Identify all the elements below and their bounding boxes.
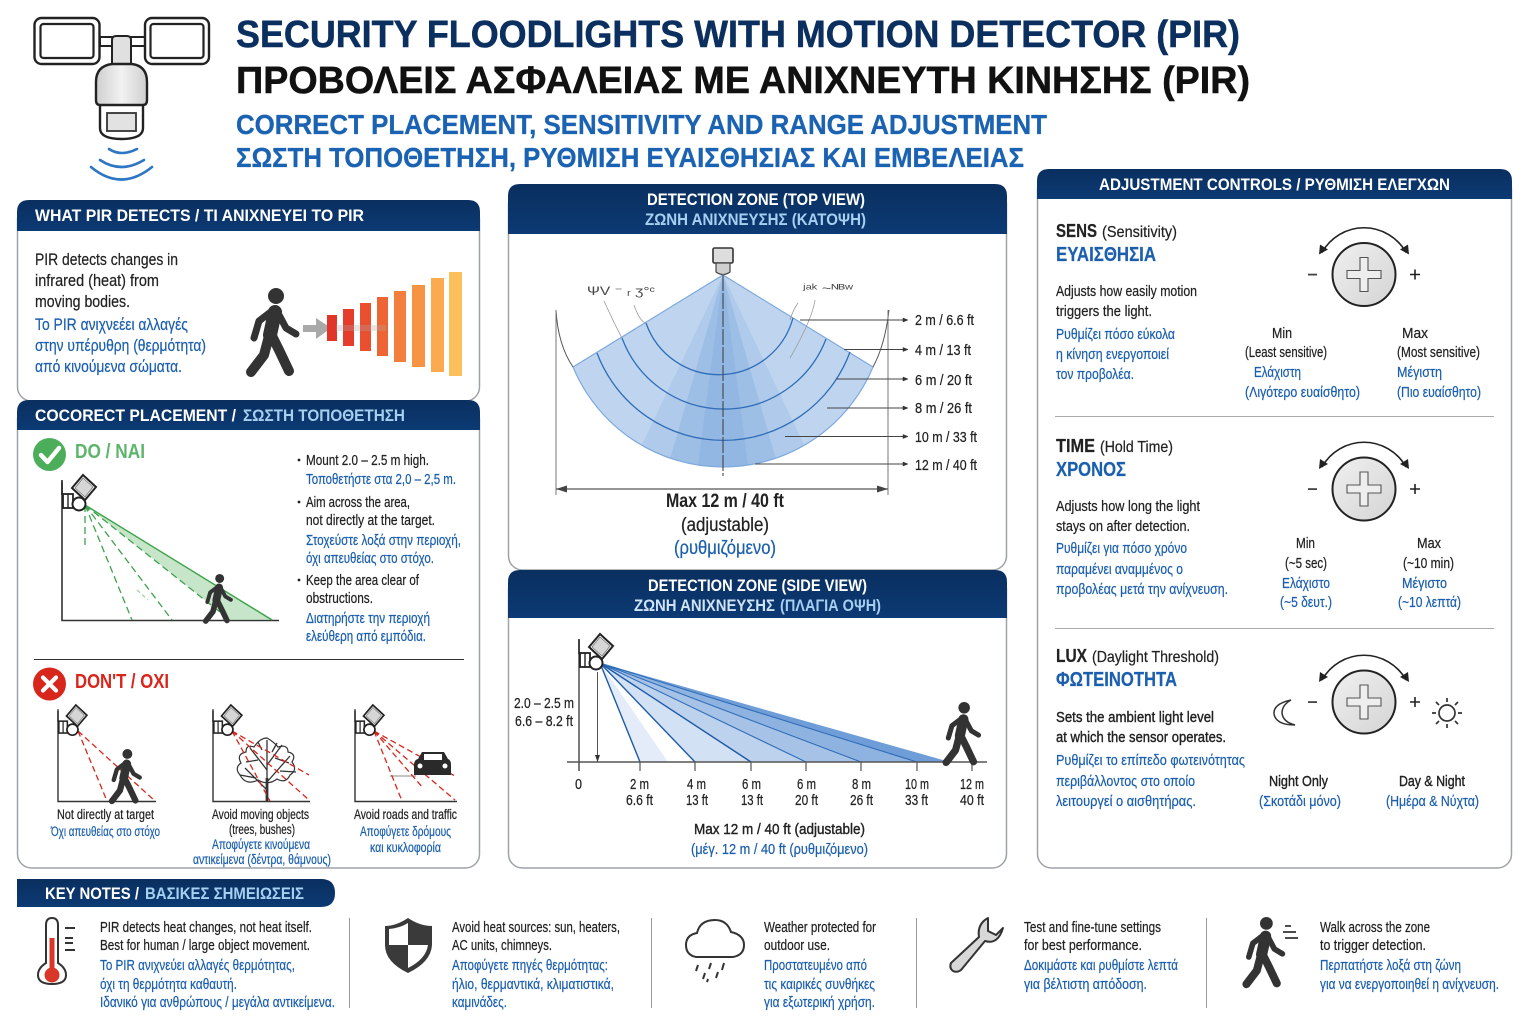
- control: TIME: Max: [1417, 536, 1442, 552]
- heading: key notes: [17, 879, 335, 907]
- note: heat: όχι τη θερμότητα καθαυτή.: [100, 976, 237, 993]
- diagram: not directly at target: [58, 705, 156, 802]
- caption: avoid roads: και κυκλοφορία: [370, 840, 441, 855]
- text block: do bullets: ελεύθερη από εμπόδια.: [306, 629, 426, 645]
- axis labels: 10 m: [905, 777, 929, 793]
- distance labels: 2 m / 6.6 ft: [915, 313, 974, 329]
- text block: do bullets: not directly at the target.: [306, 513, 435, 529]
- subtitle: CORRECT PLACEMENT, SENSITIVITY AND RANGE ADJUSTMENT: [236, 109, 1047, 140]
- note: walk test: to trigger detection.: [1320, 937, 1426, 954]
- note: heat: PIR detects heat changes, not heat itself.: [100, 919, 312, 936]
- max range note: (adjustable): [681, 515, 769, 536]
- max range note: (ρυθμιζόμενο): [674, 538, 776, 559]
- control: LUX: (Daylight Threshold): [1092, 649, 1219, 666]
- heading: don't: DON'T / ΟΧΙ: [75, 671, 169, 693]
- axis labels: 26 ft: [850, 793, 873, 809]
- control: TIME: (~5 sec): [1285, 556, 1327, 572]
- diagram: avoid roads: [355, 705, 457, 802]
- title: ΠΡΟΒΟΛΕΙΣ ΑΣΦΑΛΕΙΑΣ ΜΕ ΑΝΙΧΝΕΥΤΗ ΚΙΝΗΣΗΣ (PIR): [236, 60, 1250, 102]
- axis labels: 6.6 ft: [626, 793, 653, 809]
- note: weather: outdoor use.: [764, 937, 830, 954]
- text block: do bullets: Aim across the area,: [306, 495, 410, 511]
- icon: thermometer: [38, 918, 75, 984]
- distance labels: 12 m / 40 ft: [915, 458, 977, 474]
- control: SENS: ΕΥΑΙΣΘΗΣΙΑ: [1056, 244, 1156, 266]
- control: SENS: (Sensitivity): [1102, 224, 1177, 241]
- chart: top view fan: [556, 270, 890, 495]
- heading: what PIR detects: [17, 200, 480, 231]
- icon: green check: [33, 438, 66, 471]
- heading: what PIR detects: WHAT PIR DETECTS / ΤΙ ΑΝΙΧΝΕΥΕΙ ΤΟ PIR: [35, 207, 364, 225]
- text block: do bullets: obstructions.: [306, 591, 373, 607]
- control: LUX: [1056, 646, 1479, 810]
- icon: red cross: [33, 668, 66, 700]
- text block: PIR explanation: [35, 250, 206, 376]
- control: SENS: Max: [1402, 326, 1429, 342]
- note: heat: Το PIR ανιχνεύει αλλαγές θερμότητας,: [100, 957, 295, 974]
- control: SENS: Adjusts how easily motion: [1056, 283, 1197, 300]
- note: weather: Προστατευμένο από: [764, 957, 867, 974]
- note: heat sources: ήλιο, θερμαντικά, κλιματιστικά,: [452, 976, 614, 993]
- heading: key notes: ΒΑΣΙΚΕΣ ΣΗΜΕΙΩΣΕΙΣ: [145, 885, 304, 903]
- control: LUX: ΦΩΤΕΙΝΟΤΗΤΑ: [1056, 669, 1177, 691]
- axis labels: 6 m: [797, 777, 816, 793]
- heading: side view: [508, 570, 1007, 618]
- text block: PIR explanation: από κινούμενα σώματα.: [35, 357, 182, 376]
- height label: 6.6 – 8.2 ft: [515, 714, 573, 730]
- heading: correct placement: COCORECT PLACEMENT /: [35, 407, 236, 425]
- note: test: for best performance.: [1024, 937, 1142, 954]
- distance labels: 4 m / 13 ft: [915, 343, 971, 359]
- control: TIME: [1056, 436, 1461, 611]
- note: test: [1024, 919, 1178, 993]
- distance labels: 10 m / 33 ft: [915, 430, 977, 446]
- diagram: avoid moving objects: [213, 705, 310, 802]
- heading: side view: DETECTION ZONE (SIDE VIEW): [648, 577, 867, 595]
- control: TIME: παραμένει αναμμένος ο: [1056, 561, 1183, 578]
- distance labels: 8 m / 26 ft: [915, 401, 972, 417]
- control: TIME: (~5 δευτ.): [1280, 595, 1332, 611]
- control: SENS: [1056, 221, 1481, 401]
- note: heat: Best for human / large object movement.: [100, 937, 310, 954]
- control: LUX: Day & Night: [1399, 773, 1466, 790]
- panel: adjustment controls: [1037, 169, 1512, 868]
- text block: do bullets: Τοποθετήστε στα 2,0 – 2,5 m.: [306, 472, 456, 488]
- heading: correct placement: ΣΩΣΤΗ ΤΟΠΟΘΕΤΗΣΗ: [243, 407, 405, 425]
- control: LUX: (Ημέρα & Νύχτα): [1386, 793, 1479, 810]
- note: heat: Ιδανικό για ανθρώπους / μεγάλα αντικείμενα.: [100, 994, 335, 1011]
- heat bars: [327, 272, 462, 376]
- caption: avoid roads: Avoid roads and traffic: [354, 807, 457, 822]
- note: heat sources: Avoid heat sources: sun, heaters,: [452, 919, 620, 936]
- axis labels: 8 m: [852, 777, 871, 793]
- control: SENS: (Least sensitive): [1245, 345, 1327, 361]
- note: heat sources: [452, 919, 620, 1011]
- chart: side view beams: [567, 634, 987, 771]
- control: SENS: Min: [1272, 326, 1292, 342]
- title: SECURITY FLOODLIGHTS WITH MOTION DETECTOR (PIR): [236, 14, 1240, 56]
- control: LUX: LUX: [1056, 646, 1087, 666]
- text block: do bullets: Mount 2.0 – 2.5 m high.: [306, 453, 429, 469]
- subtitle: ΣΩΣΤΗ ΤΟΠΟΘΕΤΗΣΗ, ΡΥΘΜΙΣΗ ΕΥΑΙΣΘΗΣΙΑΣ ΚΑΙ ΕΜΒΕΛΕΙΑΣ: [236, 142, 1024, 173]
- panel: what PIR detects: [17, 200, 480, 401]
- chart: top view fan: ʲᵃᵏ ~ᴺᴮʷ: [802, 283, 854, 295]
- icon: sensor: [713, 248, 733, 274]
- side view range note: Max 12 m / 40 ft (adjustable): [694, 821, 865, 838]
- icon: shield: [385, 918, 432, 973]
- arrow: [303, 318, 331, 339]
- height label: [514, 696, 574, 730]
- caption: not directly at target: Not directly at target: [57, 807, 154, 822]
- heading: top view: DETECTION ZONE (TOP VIEW): [647, 191, 865, 209]
- icon: rain cloud: [686, 920, 744, 982]
- title: [236, 14, 1250, 102]
- icon: floodlight with sensor: [34, 18, 209, 180]
- heading: adjustment controls: ADJUSTMENT CONTROLS / ΡΥΘΜΙΣΗ ΕΛΕΓΧΩΝ: [1099, 176, 1450, 194]
- axis labels: [575, 777, 984, 809]
- side view range note: (μέγ. 12 m / 40 ft (ρυθμιζόμενο): [691, 841, 868, 858]
- panel: detection zone side view: [508, 570, 1007, 868]
- control: TIME: TIME: [1056, 436, 1095, 456]
- caption: avoid moving objects: (trees, bushes): [229, 822, 295, 837]
- note: heat sources: Αποφύγετε πηγές θερμότητας:: [452, 957, 608, 974]
- control: SENS: Μέγιστη: [1397, 365, 1442, 381]
- control: TIME: Μέγιστο: [1402, 576, 1447, 592]
- panel: correct placement: [17, 400, 480, 868]
- note: heat: [100, 919, 335, 1011]
- control: TIME: (Hold Time): [1100, 439, 1173, 456]
- control: LUX: (Σκοτάδι μόνο): [1259, 793, 1341, 810]
- caption: avoid roads: [354, 807, 457, 855]
- caption: avoid moving objects: Αποφύγετε κινούμενα: [212, 837, 310, 852]
- max range note: [666, 491, 785, 559]
- text block: do bullets: όχι απευθείας στο στόχο.: [306, 551, 434, 567]
- icon: TIME dial: [1308, 442, 1420, 520]
- note: walk test: Walk across the zone: [1320, 919, 1430, 936]
- distance labels: 6 m / 20 ft: [915, 373, 972, 389]
- control: TIME: Ρυθμίζει για πόσο χρόνο: [1056, 540, 1187, 557]
- control: SENS: triggers the light.: [1056, 303, 1152, 320]
- note: heat sources: καμινάδες.: [452, 994, 507, 1011]
- control: SENS: SENS: [1056, 221, 1097, 241]
- chart: top view fan: ΨV ⁻ ᵣ ʒ°ᶜ: [587, 284, 655, 298]
- caption: avoid moving objects: αντικείμενα (δέντρα, θάμνους): [193, 852, 331, 867]
- axis labels: 20 ft: [795, 793, 818, 809]
- heading: side view: (ΠΛΑΓΙΑ ΟΨΗ): [780, 597, 881, 615]
- text block: do bullets: Διατηρήστε την περιοχή: [306, 611, 430, 627]
- heading: adjustment controls: [1037, 169, 1512, 199]
- icon: moon: [1274, 700, 1295, 725]
- note: test: για βέλτιστη απόδοση.: [1024, 976, 1147, 993]
- note: walk test: Περπατήστε λοξά στη ζώνη: [1320, 957, 1461, 974]
- axis labels: 6 m: [742, 777, 761, 793]
- text block: do bullets: Στοχεύστε λοξά στην περιοχή,: [306, 533, 461, 549]
- control: SENS: η κίνηση ενεργοποιεί: [1056, 346, 1170, 363]
- control: SENS: (Πιο ευαίσθητο): [1397, 385, 1481, 401]
- axis labels: 13 ft: [741, 793, 763, 809]
- note: weather: για εξωτερική χρήση.: [764, 994, 875, 1011]
- control: LUX: Sets the ambient light level: [1056, 709, 1214, 726]
- control: LUX: at which the sensor operates.: [1056, 729, 1226, 746]
- icon: walking person: [251, 288, 296, 372]
- text block: PIR explanation: infrared (heat) from: [35, 271, 159, 290]
- control: SENS: τον προβολέα.: [1056, 366, 1134, 383]
- heading: side view: ΖΩΝΗ ΑΝΙΧΝΕΥΣΗΣ: [634, 597, 775, 615]
- control: TIME: Min: [1296, 536, 1315, 552]
- control: TIME: προβολέας μετά την ανίχνευση.: [1056, 581, 1228, 598]
- caption: not directly at target: [50, 807, 160, 839]
- icon: sun: [1432, 698, 1462, 728]
- control: SENS: Ελάχιστη: [1254, 365, 1301, 381]
- caption: avoid moving objects: Avoid moving objects: [212, 807, 309, 822]
- control: LUX: Night Only: [1269, 773, 1328, 790]
- subtitle: [236, 109, 1047, 173]
- icon: walker with motion lines: [1246, 917, 1298, 984]
- control: SENS: Ρυθμίζει πόσο εύκολα: [1056, 326, 1175, 343]
- control: TIME: stays on after detection.: [1056, 518, 1190, 535]
- diagram: correct aiming: [62, 475, 279, 621]
- max range note: Max 12 m / 40 ft: [666, 491, 785, 512]
- note: heat sources: AC units, chimneys.: [452, 937, 552, 954]
- note: walk test: [1320, 919, 1499, 993]
- axis labels: 40 ft: [960, 793, 984, 809]
- axis labels: 4 m: [687, 777, 706, 793]
- axis labels: 33 ft: [905, 793, 928, 809]
- axis labels: 2 m: [630, 777, 649, 793]
- control: SENS: (Λιγότερο ευαίσθητο): [1245, 385, 1360, 401]
- side view range note: [691, 821, 868, 858]
- caption: avoid roads: Αποφύγετε δρόμους: [360, 824, 451, 839]
- note: weather: Weather protected for: [764, 919, 876, 936]
- text block: PIR explanation: Το PIR ανιχνεέει αλλαγές: [35, 315, 188, 334]
- control: LUX: λειτουργεί ο αισθητήρας.: [1056, 793, 1196, 810]
- axis labels: 13 ft: [686, 793, 708, 809]
- control: LUX: περιβάλλοντος στο οποίο: [1056, 773, 1195, 790]
- control: SENS: (Most sensitive): [1397, 345, 1480, 361]
- heading: top view: ΖΩΝΗ ΑΝΙΧΝΕΥΣΗΣ (ΚΑΤΟΨΗ): [645, 211, 866, 229]
- panel: detection zone top view: [508, 184, 1007, 570]
- control: TIME: ΧΡΟΝΟΣ: [1056, 459, 1126, 481]
- text block: PIR explanation: PIR detects changes in: [35, 250, 178, 269]
- note: weather: [764, 919, 876, 1011]
- panel: key notes: [17, 879, 1499, 1011]
- axis labels: 0: [575, 777, 582, 793]
- control: TIME: (~10 min): [1403, 556, 1454, 572]
- text block: PIR explanation: στην υπέρυθρη (θερμότητα): [35, 336, 206, 355]
- control: LUX: Ρυθμίζει το επίπεδο φωτεινότητας: [1056, 752, 1245, 769]
- note: weather: τις καιρικές συνθήκες: [764, 976, 875, 993]
- note: test: Test and fine-tune settings: [1024, 919, 1161, 936]
- icon: wrench: [950, 918, 1003, 972]
- height label: 2.0 – 2.5 m: [514, 696, 574, 712]
- text block: do bullets: Keep the area clear of: [306, 573, 420, 589]
- heading: top view: [508, 184, 1007, 234]
- distance labels: [755, 313, 977, 474]
- control: TIME: Adjusts how long the light: [1056, 498, 1201, 515]
- heading: do: DO / ΝΑΙ: [75, 441, 145, 463]
- caption: avoid moving objects: [193, 807, 331, 867]
- icon: LUX dial: [1308, 655, 1420, 734]
- axis labels: 12 m: [960, 777, 984, 793]
- control: TIME: (~10 λεπτά): [1398, 595, 1461, 611]
- text block: PIR explanation: moving bodies.: [35, 292, 130, 311]
- heading: key notes: KEY NOTES /: [45, 885, 139, 903]
- caption: not directly at target: Όχι απευθείας στο στόχο: [50, 824, 160, 839]
- heading: correct placement: [17, 400, 480, 430]
- note: test: Δοκιμάστε και ρυθμίστε λεπτά: [1024, 957, 1178, 974]
- text block: do bullets: [298, 453, 461, 645]
- control: TIME: Ελάχιστο: [1282, 576, 1330, 592]
- icon: SENS dial: [1308, 228, 1420, 306]
